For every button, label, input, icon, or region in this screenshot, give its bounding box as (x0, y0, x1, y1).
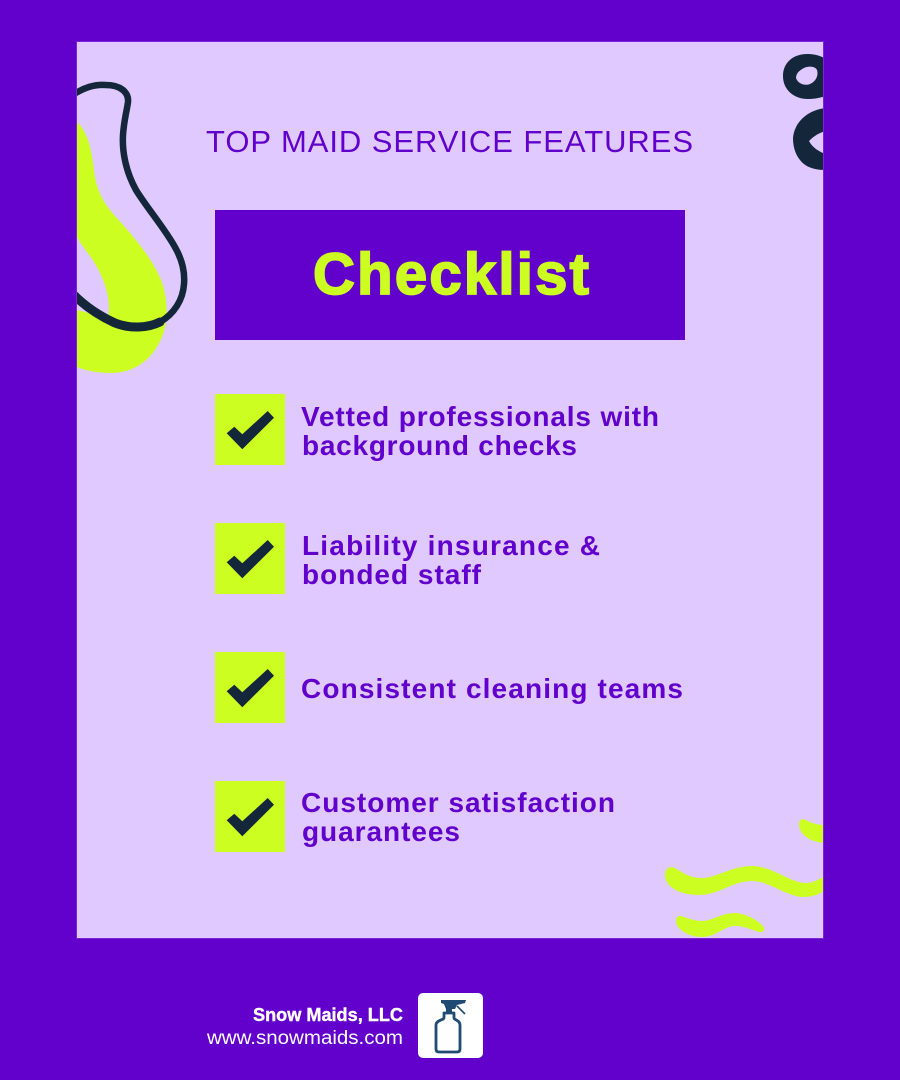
footer company text: www.snowmaids.com (206, 1028, 403, 1049)
checklist item 4 (215, 781, 615, 852)
item text: Customer satisfaction (301, 787, 615, 818)
decoration: lime waves (665, 819, 826, 937)
icon: check box (215, 523, 285, 594)
heading box: checklist: Checklist (313, 242, 589, 307)
footer company text: Snow Maids, LLC (253, 1005, 403, 1025)
item text: Liability insurance & (302, 530, 600, 561)
item text: Consistent cleaning teams (301, 673, 683, 704)
checklist item 3 (215, 652, 683, 723)
item text: Vetted professionals with (301, 401, 659, 432)
checklist item 2 (215, 523, 600, 594)
item text: bonded staff (302, 559, 482, 590)
item text: background checks (302, 430, 577, 461)
icon: check box (215, 394, 285, 465)
decoration: dark rings (783, 54, 826, 170)
icon: check box (215, 652, 285, 723)
title: TOP MAID SERVICE FEATURES (206, 124, 693, 159)
decoration: lime blob and dark outline (74, 85, 184, 373)
icon: check box (215, 781, 285, 852)
icon: spray bottle logo (418, 993, 483, 1058)
panel: checklist card (74, 42, 826, 938)
heading box: checklist (215, 210, 685, 340)
item text: guarantees (302, 816, 460, 847)
footer company text (206, 1005, 403, 1049)
checklist item 1 (215, 394, 659, 465)
